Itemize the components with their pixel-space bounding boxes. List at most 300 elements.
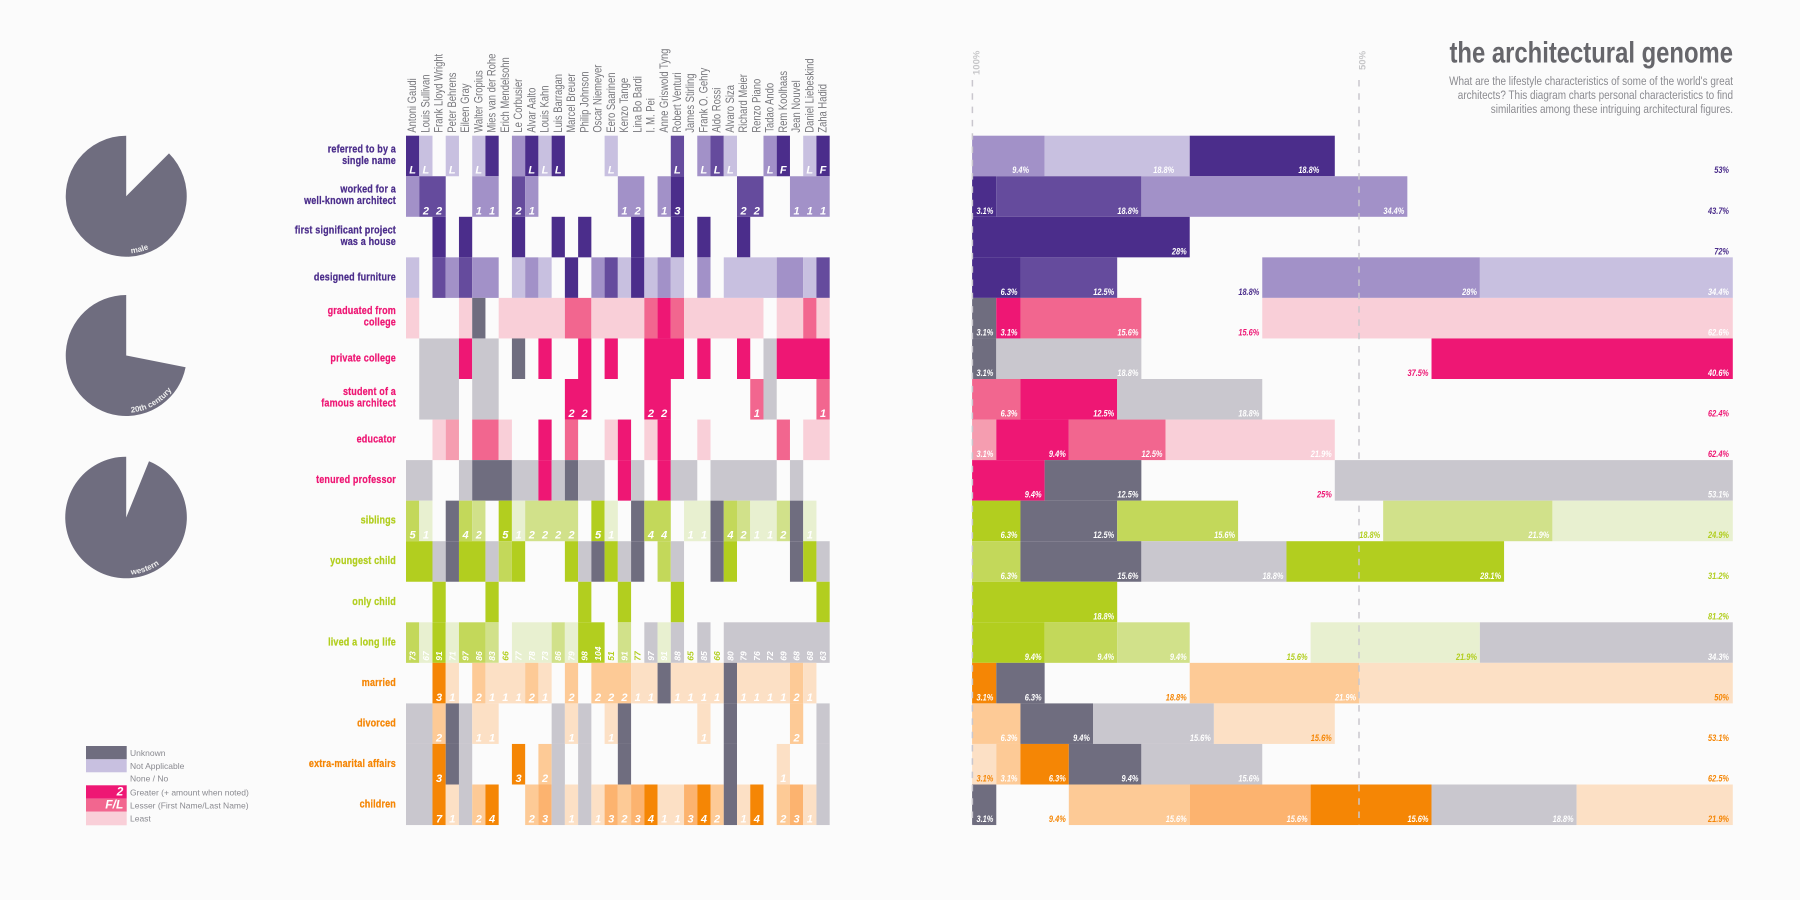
stacked bar: extra-marital affairs: 9.4% [1122,773,1139,784]
row labels: first significant project [295,225,396,237]
stacked bar: worked for a well-known architect: 3.1% [976,205,994,216]
matrix row: worked for a well-known architect: 1 [661,205,667,217]
matrix row: siblings: 5 [410,530,417,542]
matrix row: children: 4 [647,814,654,826]
matrix row: worked for a well-known architect: 1 [794,205,800,217]
matrix row: siblings: 4 [726,530,733,542]
stacked bar: tenured professor: 53.1% [1708,489,1729,500]
stacked bar: educator: 21.9% [1310,448,1332,459]
matrix row: lived a long life: 68 [805,651,815,661]
stacked bar: youngest child: 6.3% [1001,570,1018,581]
matrix row: divorced: 1 [701,732,707,744]
architect names: Le Corbusier [512,78,525,133]
stacked bar: designed furniture: 6.3% [1001,286,1018,297]
matrix row: referred to by a single name: L [727,165,734,177]
pie chart: western: western [130,562,159,574]
architect names: Antoni Gaudi [406,78,419,133]
matrix row: worked for a well-known architect: 1 [807,205,813,217]
stacked bar: educator: 62.4% [1708,448,1729,459]
legend: Least [130,814,151,824]
stacked bar: graduated from college [972,298,1733,338]
stacked bar: worked for a well-known architect: 43.7% [1707,205,1729,216]
matrix row: children: 3 [688,814,694,826]
matrix row: children: 1 [661,814,667,826]
matrix row: children: 2 [475,814,482,826]
matrix row: lived a long life: 77 [633,650,643,661]
stacked bar: lived a long life: 15.6% [1287,651,1308,662]
stacked bar: extra-marital affairs: 6.3% [1049,773,1066,784]
matrix row: student of a famous architect: 2 [660,408,667,420]
architect names: Rem Koolhaas [777,71,790,133]
stacked bar: graduated from college: 3.1% [1001,327,1018,338]
matrix row: extra-marital affairs: 1 [780,773,786,785]
matrix row: children: 3 [608,814,614,826]
row labels: student of a [343,386,396,398]
stacked bar: educator: 12.5% [1142,448,1163,459]
matrix row: referred to by a single name: L [423,165,430,177]
matrix row: married: 1 [449,692,455,704]
matrix row: married: 2 [607,692,614,704]
stacked bar: designed furniture: 28% [1461,286,1477,297]
matrix row: worked for a well-known architect: 2 [514,205,522,217]
matrix row: worked for a well-known architect: 1 [820,205,826,217]
row labels: well-known architect [303,195,396,207]
matrix row: married: 2 [567,692,575,704]
architect names: Alvaro Siza [724,85,737,133]
architect names: Zaha Hadid [817,84,830,133]
matrix row: siblings: 1 [807,530,813,542]
stacked bar: divorced: 6.3% [1001,732,1018,743]
architect names: Oscar Niemeyer [592,64,605,133]
matrix row: siblings: 4 [647,530,654,542]
matrix row: children: 1 [741,814,747,826]
matrix row: lived a long life: 63 [818,651,828,661]
legend: Lesser (First Name/Last Name) [130,800,249,810]
stacked bar: youngest child: 18.8% [1262,570,1284,581]
stacked bar: educator: 3.1% [976,448,994,459]
legend: Greater (+ amount when noted) [130,787,249,797]
matrix row: siblings: 2 [567,530,575,542]
matrix row: lived a long life: 69 [778,651,788,661]
architect names: Alvar Aalto [526,88,539,133]
matrix row: worked for a well-known architect: 1 [621,205,627,217]
row labels: extra-marital affairs [309,758,396,770]
matrix row: children: 1 [595,814,601,826]
matrix row: children: 4 [488,814,495,826]
matrix row: only child [432,582,830,622]
matrix row: married: 1 [741,692,747,704]
matrix row: married: 1 [701,692,707,704]
matrix row: lived a long life: 78 [527,651,537,661]
matrix row: lived a long life [406,622,830,663]
stacked bar: children: 9.4% [1049,813,1066,824]
stacked bar: siblings [972,501,1733,541]
matrix row: children: 2 [620,814,627,826]
matrix row: lived a long life: 91 [659,651,669,661]
legend: None / No [130,774,169,784]
stacked bar: extra-marital affairs: 3.1% [976,773,994,784]
matrix row: married: 2 [793,692,800,704]
stacked bar: divorced: 15.6% [1311,732,1332,743]
matrix row: married: 1 [807,692,813,704]
stacked bar: siblings: 24.9% [1707,529,1729,540]
stacked bar: private college: 3.1% [976,367,994,378]
intro text: What are the lifestyle characteristics of some of the world's great [1449,75,1733,88]
matrix row: married: 1 [714,692,720,704]
stacked bar: worked for a well-known architect [972,176,1729,217]
matrix row: siblings: 2 [740,530,747,542]
architect names: Louis Sullivan [420,74,433,133]
matrix row: married: 2 [594,692,601,704]
stacked bar: private college: 37.5% [1408,367,1429,378]
matrix row: siblings: 1 [701,530,707,542]
matrix row: worked for a well-known architect: 2 [422,205,429,217]
matrix row: siblings: 2 [554,530,561,542]
matrix row: worked for a well-known architect: 2 [634,205,641,217]
matrix row: lived a long life: 98 [580,651,590,661]
architect names: Eero Saarinen [605,72,618,133]
matrix row: referred to by a single name: L [542,165,549,177]
stacked bar: tenured professor: 25% [1316,489,1332,500]
stacked bar: graduated from college: 15.6% [1117,327,1139,338]
architect names: Anne Griswold Tyng [658,48,671,133]
matrix row: children: 1 [674,814,680,826]
stacked bar: graduated from college: 15.6% [1238,327,1260,338]
matrix row: tenured professor [406,460,803,501]
row labels: tenured professor [316,474,396,486]
matrix row: worked for a well-known architect [406,176,830,217]
row labels: famous architect [321,398,396,410]
matrix row: divorced: 1 [489,732,495,744]
matrix row: married: 1 [767,692,773,704]
matrix row: siblings: 2 [779,530,786,542]
matrix row: siblings: 5 [595,530,602,542]
matrix row: worked for a well-known architect: 1 [476,205,482,217]
stacked bar: extra-marital affairs: 3.1% [1001,773,1018,784]
stacked bar: divorced: 9.4% [1073,732,1090,743]
matrix row: children: 2 [713,814,720,826]
matrix row: divorced: 2 [793,732,800,744]
matrix row: children: 4 [700,814,707,826]
matrix row: youngest child [406,541,830,582]
pie chart: male [66,136,187,257]
row labels: referred to by a [328,144,396,156]
stacked bar: designed furniture [972,257,1733,298]
stacked bar: student of a famous architect [972,379,1729,420]
stacked bar: children: 15.6% [1287,813,1308,824]
stacked bar: private college: 18.8% [1117,367,1139,378]
matrix row: lived a long life: 97 [646,650,656,661]
architect names: Daniel Liebeskind [804,58,817,133]
stacked bar: children: 18.8% [1553,813,1574,824]
matrix row: lived a long life: 79 [566,651,576,661]
matrix row: referred to by a single name: L [674,165,681,177]
matrix row: designed furniture [406,257,830,298]
matrix row: lived a long life: 72 [765,651,775,661]
matrix row: referred to by a single name [406,136,830,177]
stacked bar: educator [972,420,1729,460]
architect names: Philip Johnson [578,71,592,133]
matrix row: student of a famous architect: 2 [567,408,575,420]
stacked bar: married: 3.1% [976,691,994,703]
architect names [406,48,830,133]
stacked bar: tenured professor [972,460,1733,501]
matrix row: siblings: 2 [475,530,482,542]
matrix row: student of a famous architect: 1 [820,408,826,420]
architect names: Peter Behrens [446,72,459,133]
matrix row: first significant project was a house [432,217,750,257]
matrix row: married: 1 [674,692,680,704]
row labels: only child [352,596,396,608]
matrix row: referred to by a single name: F [780,165,787,177]
stacked bar: referred to by a single name: 9.4% [1012,164,1030,175]
stacked bar: children: 15.6% [1166,813,1187,824]
matrix row: lived a long life: 73 [540,651,550,661]
matrix row: student of a famous architect: 2 [581,408,588,420]
stacked bar: extra-marital affairs [972,744,1729,784]
legend: 2 [116,784,124,798]
matrix row: married: 2 [620,692,627,704]
matrix row: married: 1 [635,692,641,704]
matrix row: married [432,663,816,704]
architect names: Kenzo Tange [618,78,631,133]
stacked bar: private college [972,338,1733,379]
matrix row: educator [432,420,830,460]
matrix row: worked for a well-known architect: 3 [674,205,680,217]
architect names: Frank Lloyd Wright [433,54,446,133]
matrix row: married: 1 [502,692,508,704]
stacked bar: graduated from college: 62.6% [1708,327,1729,338]
row labels: was a house [340,236,396,248]
stacked bar: educator: 9.4% [1049,448,1066,459]
title: the architectural genome [1449,35,1733,69]
matrix row: siblings: 1 [423,530,429,542]
architect names: Robert Venturi [671,72,684,133]
matrix row: lived a long life: 65 [686,651,696,661]
matrix row: divorced: 1 [476,732,482,744]
stacked bar: only child: 18.8% [1093,610,1115,622]
architect names: Renzo Piano [751,79,764,133]
stacked bar: only child [972,582,1729,622]
matrix row: extra-marital affairs: 3 [436,773,442,785]
matrix row: referred to by a single name: L [555,165,562,177]
matrix row: children: 4 [753,814,760,826]
stacked bar: divorced: 15.6% [1190,732,1211,743]
matrix row: lived a long life: 77 [514,650,524,661]
stacked bar: referred to by a single name: 18.8% [1153,164,1175,175]
matrix row: children: 1 [568,814,575,826]
stacked bar: siblings: 21.9% [1528,529,1550,540]
matrix row: lived a long life: 80 [725,651,735,661]
matrix row: married: 3 [436,692,442,704]
matrix row: lived a long life: 71 [447,651,457,661]
matrix row: graduated from college [406,298,830,338]
stacked bar: lived a long life: 9.4% [1170,651,1187,662]
100% reference line: 100% [972,50,982,75]
matrix row: lived a long life: 86 [474,651,484,661]
matrix row: lived a long life: 79 [739,651,749,661]
row labels: siblings [361,515,396,527]
legend: Not Applicable [130,761,185,771]
matrix row: siblings: 1 [515,530,522,542]
matrix row: married: 1 [754,692,760,704]
matrix row: married: 1 [648,692,654,704]
matrix row: siblings: 2 [541,530,548,542]
matrix row: children: 2 [779,814,786,826]
stacked bar: tenured professor: 9.4% [1025,489,1042,500]
matrix row: married: 1 [688,692,694,704]
stacked bar: student of a famous architect: 12.5% [1093,408,1115,419]
matrix row: worked for a well-known architect: 2 [740,205,747,217]
stacked bar: siblings: 15.6% [1214,529,1236,540]
legend: F/L [105,798,123,812]
stacked bar: children: 21.9% [1707,813,1729,824]
stacked bar: first significant project was a house [972,217,1729,257]
architect names: Richard Meier [737,74,750,133]
matrix row: referred to by a single name: L [806,165,813,177]
matrix row: divorced [406,703,830,744]
matrix row: children [406,784,830,826]
matrix row: lived a long life: 85 [699,651,709,661]
stacked bar: married: 18.8% [1166,691,1187,703]
matrix row: lived a long life: 66 [500,651,510,661]
matrix row: student of a famous architect: 1 [754,408,760,420]
stacked bar: lived a long life: 9.4% [1025,651,1042,662]
architect names: I. M. Pei [645,98,658,133]
matrix row: referred to by a single name: L [449,165,456,177]
matrix row: student of a famous architect [419,379,830,420]
architect names: Eileen Gray [459,83,472,133]
matrix row: siblings: 1 [767,530,773,542]
intro text: similarities among these intriguing architectural figures. [1491,103,1733,116]
stacked bar: married: 6.3% [1025,691,1042,703]
matrix row: divorced: 1 [568,732,575,744]
stacked bar: extra-marital affairs: 62.5% [1708,773,1729,784]
matrix row: married: 1 [780,692,786,704]
matrix row: referred to by a single name: L [608,165,615,177]
stacked bar: referred to by a single name: 18.8% [1298,164,1320,175]
stacked bar: first significant project was a house: 28% [1171,245,1187,257]
stacked bar: first significant project was a house: 72% [1714,245,1729,257]
matrix row: lived a long life: 91 [619,651,629,661]
stacked bar: siblings: 18.8% [1359,529,1381,540]
row labels: graduated from [328,305,396,317]
stacked bar: divorced: 53.1% [1708,732,1729,743]
matrix row: married: 1 [542,692,548,704]
matrix row: siblings: 5 [502,530,509,542]
matrix row: lived a long life: 86 [553,651,563,661]
pie chart: male: male [131,245,148,254]
matrix row: worked for a well-known architect: 2 [435,205,442,217]
matrix row: lived a long life: 66 [712,651,722,661]
matrix row: children: 3 [794,814,800,826]
stacked bar: divorced [972,703,1729,744]
matrix row: siblings: 4 [462,530,469,542]
stacked bar: student of a famous architect: 6.3% [1001,408,1018,419]
stacked bar: worked for a well-known architect: 18.8% [1117,205,1139,216]
stacked bar: youngest child [972,541,1729,582]
matrix row: lived a long life: 68 [792,651,802,661]
matrix row: referred to by a single name: L [701,165,708,177]
matrix row: referred to by a single name: F [820,165,827,177]
row labels: divorced [357,718,396,730]
stacked bar: children [972,784,1733,825]
row labels: married [362,677,396,689]
stacked bar: student of a famous architect: 62.4% [1708,408,1729,419]
matrix row: extra-marital affairs: 3 [515,773,522,785]
architect names: Walter Gropius [473,70,486,133]
architect names: Frank O. Gehry [698,67,711,133]
matrix row: married: 2 [528,692,535,704]
stacked bar: worked for a well-known architect: 34.4% [1383,205,1405,216]
stacked bar: lived a long life [972,622,1733,663]
stacked bar: siblings: 6.3% [1001,529,1018,540]
row labels: educator [357,434,396,446]
stacked bar: lived a long life: 34.3% [1708,651,1729,662]
matrix row: referred to by a single name: L [767,165,774,177]
matrix row: siblings: 2 [528,530,535,542]
matrix row: worked for a well-known architect: 2 [753,205,760,217]
matrix row: lived a long life: 91 [434,651,444,661]
legend: Unknown [130,748,166,758]
matrix row: children: 3 [635,814,641,826]
matrix row: worked for a well-known architect: 1 [489,205,495,217]
matrix row: siblings: 1 [688,530,694,542]
matrix row: children: 1 [449,814,455,826]
stacked bar: lived a long life: 21.9% [1455,651,1477,662]
matrix row: referred to by a single name: L [409,165,416,177]
matrix row: children: 7 [436,814,443,826]
architect names: Lina Bo Bardi [631,76,645,133]
stacked bar: youngest child: 31.2% [1708,570,1729,581]
row labels: worked for a [340,184,396,196]
matrix row: extra-marital affairs: 2 [541,773,548,785]
matrix row: siblings: 1 [608,530,614,542]
row labels: college [364,317,396,329]
matrix row: lived a long life: 73 [408,651,418,661]
stacked bar: private college: 40.6% [1707,367,1729,378]
architect names: Luis Barragan [552,74,565,133]
matrix row: private college [419,338,830,379]
stacked bar: married: 50% [1714,691,1729,703]
matrix row: extra-marital affairs [406,744,830,785]
matrix row: children: 3 [542,814,548,826]
architect names: Mies van der Rohe [486,54,499,133]
stacked bar: only child: 81.2% [1708,610,1729,622]
row labels: children [360,799,396,811]
architect names: Erich Mendelsohn [499,57,512,133]
matrix row: married: 1 [489,692,495,704]
matrix row: lived a long life: 83 [487,651,497,661]
pie chart: 20th century [66,295,186,416]
matrix row: divorced: 2 [435,732,442,744]
row labels: designed furniture [314,272,396,284]
matrix row: siblings: 4 [660,530,667,542]
matrix row: lived a long life: 76 [752,651,762,661]
matrix row: referred to by a single name: L [475,165,482,177]
stacked bar: married [972,663,1733,703]
stacked bar: graduated from college: 3.1% [976,327,994,338]
stacked bar: referred to by a single name: 53% [1714,164,1729,175]
stacked bar: student of a famous architect: 18.8% [1238,408,1260,419]
pie chart: western [65,456,187,578]
stacked bar: children: 15.6% [1408,813,1429,824]
matrix row: worked for a well-known architect: 1 [529,205,535,217]
matrix row: lived a long life: 97 [461,650,471,661]
row labels: lived a long life [328,637,396,649]
stacked bar: married: 21.9% [1334,691,1356,703]
matrix row: referred to by a single name: L [528,165,535,177]
